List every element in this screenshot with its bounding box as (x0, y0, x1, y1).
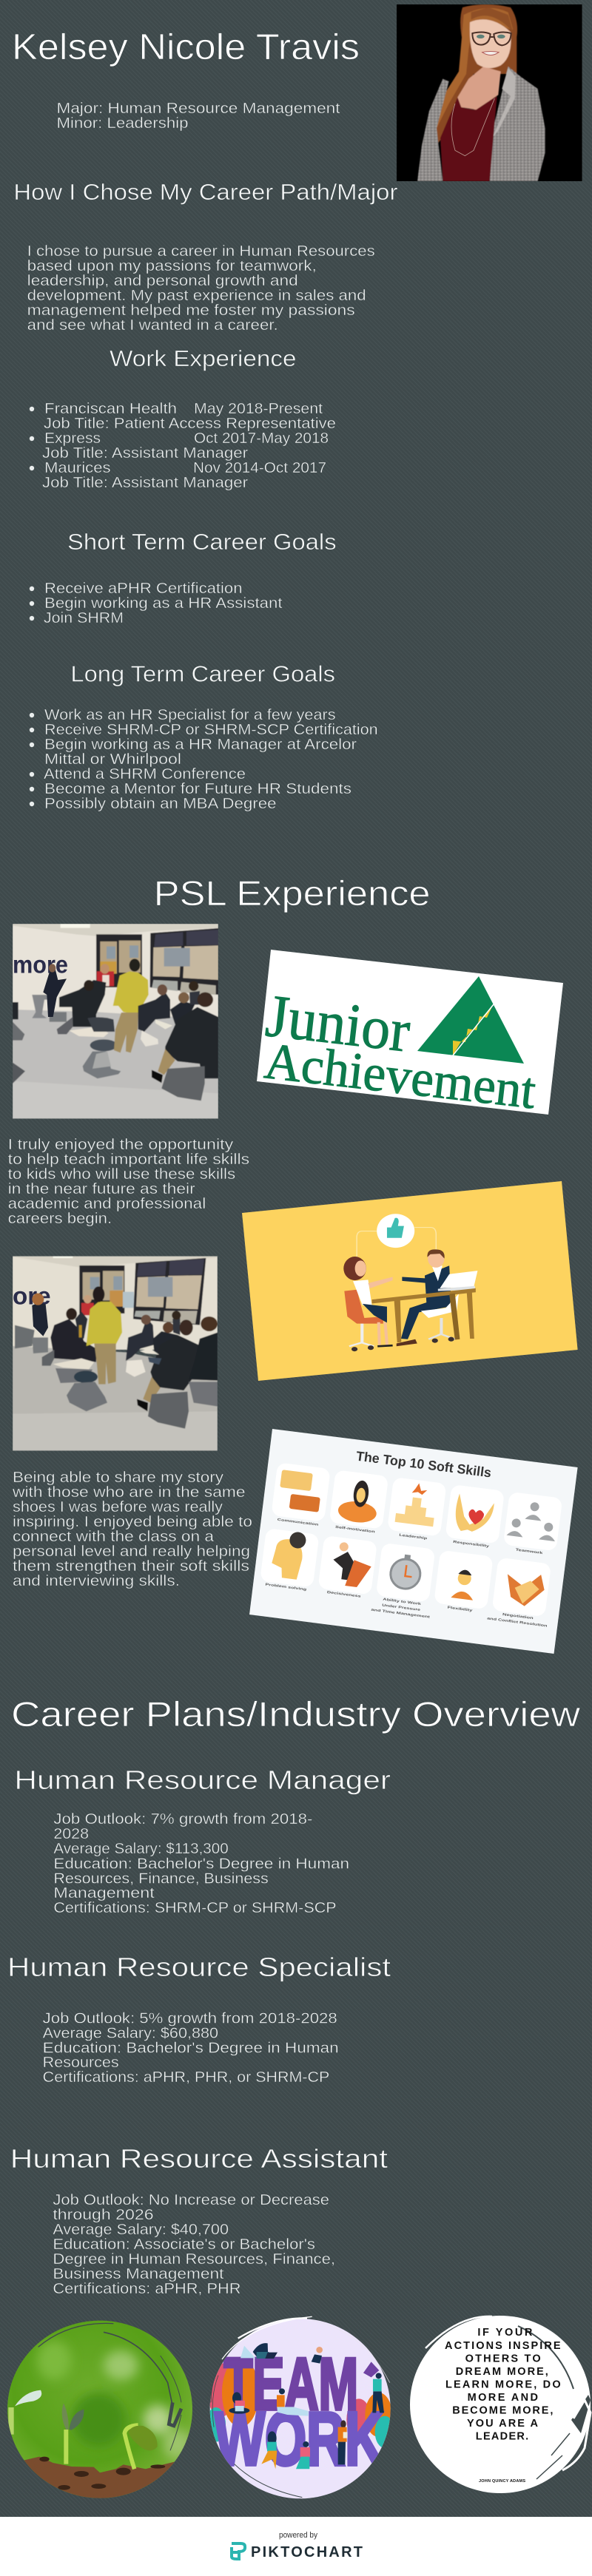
skill labels: Negotiation (502, 1612, 534, 1620)
portrait photo (397, 4, 582, 181)
heading: PSL experience: PSL Experience (154, 873, 431, 913)
quote text: YOU ARE A (467, 2418, 539, 2430)
long term goals list: Mittal or Whirlpool (44, 751, 181, 768)
PSL paragraph 2 (12, 1470, 252, 1589)
HR manager details: Job Outlook: 7% growth from 2018- (53, 1811, 312, 1828)
HR specialist details: Certifications: aPHR, PHR, or SHRM-CP (43, 2069, 329, 2086)
brush strokes (211, 2316, 390, 2498)
circle: leadership quote (410, 2316, 591, 2493)
skill labels: Problem solving (265, 1582, 307, 1592)
piktochart logo icon (232, 2543, 245, 2559)
HR manager details: Resources, Finance, Business (53, 1871, 269, 1887)
short term goals list (30, 581, 283, 626)
heading: short term goals: Short Term Career Goals (67, 529, 337, 555)
HR assistant details: Average Salary: $40,700 (53, 2222, 229, 2238)
HR manager details: 2028 (53, 1826, 89, 1842)
PSL paragraph 2: Being able to share my story (13, 1470, 223, 1486)
quote text: MORE AND (468, 2392, 538, 2404)
long term goals list (30, 707, 378, 812)
career path paragraph: and see what I wanted in a career. (27, 317, 278, 334)
powered by label: powered by (279, 2531, 317, 2540)
skill labels: and Conflict Resolution (487, 1616, 548, 1628)
long term goals list: Attend a SHRM Conference (44, 766, 246, 782)
skill labels: Self-motivation (335, 1525, 375, 1533)
skill cards (260, 1462, 562, 1617)
junior achievement logo (257, 950, 563, 1120)
skill icons (269, 1466, 560, 1611)
classroom photo 2 (13, 1256, 218, 1451)
quote text: LEARN MORE, DO (445, 2379, 561, 2390)
career path paragraph: management helped me foster my passions (27, 302, 355, 319)
brush strokes (38, 2323, 181, 2450)
brush strokes (426, 2316, 591, 2479)
career path paragraph (27, 243, 375, 334)
work experience list: Job Title: Assistant Manager (42, 475, 248, 491)
work experience list: Job Title: Patient Access Representative (44, 416, 336, 432)
classroom photo 1: more (13, 952, 68, 979)
skill labels: Ability to Work (383, 1598, 422, 1606)
heading: HR manager: Human Resource Manager (14, 1765, 391, 1795)
work experience list: Maurices (44, 460, 111, 476)
short term goals list: Begin working as a HR Assistant (44, 595, 283, 612)
quote text: OTHERS TO (465, 2353, 541, 2365)
heading: how I chose: How I Chose My Career Path/Major (13, 179, 397, 205)
junior achievement logo: Junior (263, 981, 414, 1065)
skill labels: and Time Management (371, 1608, 431, 1619)
PSL paragraph 2: with those who are in the same (12, 1484, 246, 1501)
work experience list (30, 401, 336, 491)
piktochart wordmark: PIKTOCHART (251, 2544, 363, 2560)
man with laptop (397, 1249, 477, 1346)
long term goals list: Begin working as a HR Manager at Arcelor (44, 737, 357, 753)
skill labels: Leadership (399, 1533, 428, 1540)
HR manager details: Average Salary: $113,300 (53, 1841, 229, 1857)
classroom photo 2: ore (13, 1282, 51, 1310)
short term goals list: Receive aPHR Certification (44, 581, 243, 597)
HR specialist details: Resources (43, 2055, 119, 2071)
PSL paragraph 1: in the near future as their (8, 1181, 195, 1197)
classroom photo 1 (13, 924, 218, 1119)
thumbs up icon (377, 1214, 414, 1248)
career path paragraph: I chose to pursue a career in Human Resources (27, 243, 375, 260)
HR assistant details: Certifications: aPHR, PHR (53, 2281, 241, 2297)
quote text (445, 2327, 561, 2484)
skill labels: Responsibility (453, 1540, 490, 1548)
PSL paragraph 1: to help teach important life skills (8, 1152, 249, 1168)
team figures (229, 2343, 384, 2469)
work experience list: Express (44, 430, 101, 447)
HR specialist details: Job Outlook: 5% growth from 2018-2028 (43, 2010, 337, 2026)
quote text: JOHN QUINCY ADAMS (479, 2479, 525, 2484)
PSL paragraph 2: them strengthen their soft skills (13, 1558, 249, 1575)
quote text: ACTIONS INSPIRE (445, 2340, 561, 2352)
PSL paragraph 2: connect with the class on a (13, 1529, 215, 1545)
heading: career plans: Career Plans/Industry Overview (11, 1694, 581, 1734)
major and minor: Minor: Leadership (56, 115, 188, 132)
desk (372, 1288, 476, 1342)
foliage (210, 2363, 391, 2447)
career path paragraph: leadership, and personal growth and (27, 273, 298, 289)
heading: HR specialist: Human Resource Specialist (7, 1952, 391, 1982)
skill labels: Decisiveness (327, 1590, 362, 1598)
HR specialist details: Average Salary: $60,880 (43, 2025, 218, 2041)
PSL paragraph 1: careers begin. (8, 1211, 112, 1227)
work experience list: Job Title: Assistant Manager (42, 445, 248, 462)
PSL paragraph 1: to kids who will use these skills (8, 1166, 235, 1183)
woman at desk (343, 1257, 393, 1351)
junior achievement logo: Achievement (262, 1032, 539, 1120)
circle: teamwork illustration (206, 2316, 394, 2498)
PSL paragraph 2: personal level and really helping (13, 1544, 250, 1560)
heading: work experience: Work Experience (110, 345, 296, 371)
PSL paragraph 2: and interviewing skills. (13, 1573, 180, 1589)
HR assistant details (53, 2192, 335, 2297)
major and minor (56, 101, 340, 132)
PSL paragraph 1 (8, 1137, 249, 1227)
quote text: DREAM MORE, (456, 2366, 548, 2378)
HR manager details (53, 1811, 349, 1916)
heading: HR assistant: Human Resource Assistant (10, 2143, 388, 2174)
quote text: LEADER. (476, 2430, 528, 2442)
heading: long term goals: Long Term Career Goals (70, 661, 335, 686)
quote text: BECOME MORE, (452, 2405, 553, 2417)
career path paragraph: development. My past experience in sales and (27, 288, 366, 304)
work experience list: Oct 2017-May 2018 (194, 430, 329, 447)
HR assistant details: Business Management (53, 2266, 224, 2282)
PSL paragraph 1: academic and professional (8, 1196, 206, 1212)
long term goals list: Receive SHRM-CP or SHRM-SCP Certification (44, 722, 378, 738)
HR assistant details: through 2026 (53, 2207, 154, 2223)
career path paragraph: based upon my passions for teamwork, (27, 258, 317, 274)
top 10 soft skills graphic: The Top 10 Soft Skills (355, 1449, 492, 1480)
skill labels: Flexibility (447, 1606, 473, 1612)
footer (0, 2517, 592, 2576)
major and minor: Major: Human Resource Management (56, 101, 340, 117)
PSL paragraph 2: shoes I was before was really (13, 1499, 223, 1515)
skill labels: Under Pressure (382, 1603, 421, 1612)
PSL paragraph 1: I truly enjoyed the opportunity (8, 1137, 233, 1153)
HR assistant details: Job Outlook: No Increase or Decrease (53, 2192, 329, 2208)
skill labels: Teamwork (515, 1547, 543, 1555)
circle: teamwork illustration: WORK (215, 2396, 383, 2481)
short term goals list: Join SHRM (44, 610, 124, 626)
top 10 soft skills graphic (249, 1429, 578, 1654)
HR manager details: Certifications: SHRM-CP or SHRM-SCP (53, 1900, 337, 1916)
skill labels: Communication (277, 1518, 319, 1527)
circle: teamwork illustration: TEAM (223, 2344, 358, 2426)
long term goals list: Work as an HR Specialist for a few years (44, 707, 336, 723)
work experience list: Nov 2014-Oct 2017 (193, 460, 326, 476)
HR manager details: Education: Bachelor's Degree in Human (53, 1856, 349, 1873)
long term goals list: Become a Mentor for Future HR Students (44, 781, 352, 797)
skill labels (263, 1517, 556, 1634)
circle: green seedlings (7, 2321, 192, 2498)
HR manager details: Management (53, 1885, 155, 1901)
logo triangle (417, 976, 524, 1064)
yellow meeting illustration (242, 1181, 578, 1381)
quote text: IF YOUR (477, 2327, 533, 2339)
PSL paragraph 2: inspiring. I enjoyed being able to (13, 1514, 252, 1530)
HR specialist details (43, 2010, 339, 2086)
HR assistant details: Education: Associate's or Bachelor's (53, 2237, 315, 2253)
work experience list: Franciscan Health (44, 401, 177, 417)
title: Kelsey Nicole Travis (12, 27, 360, 67)
HR specialist details: Education: Bachelor's Degree in Human (43, 2040, 339, 2056)
HR assistant details: Degree in Human Resources, Finance, (53, 2251, 335, 2268)
long term goals list: Possibly obtain an MBA Degree (44, 796, 277, 812)
work experience list: May 2018-Present (194, 401, 323, 417)
